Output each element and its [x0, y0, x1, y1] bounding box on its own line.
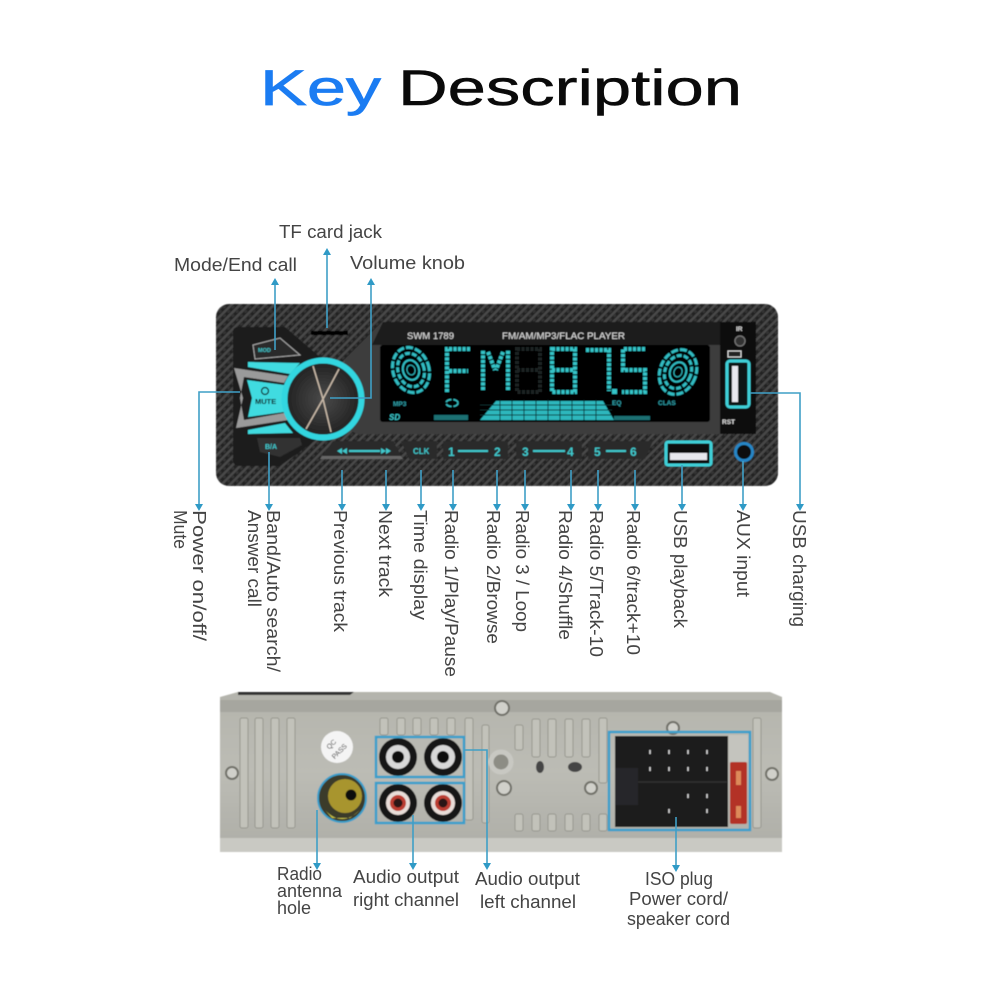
preset button 1-2: 1: [448, 445, 455, 459]
clock button: [401, 441, 437, 459]
right speaker rings: [653, 344, 703, 400]
player label: FM/AM/MP3/FLAC PLAYER: [502, 331, 625, 342]
leader lines and arrows: front: [195, 248, 804, 511]
label: Power on/off/ Mute: Power on/off/: [189, 510, 209, 641]
label: Audio output right channel: Audio output: [353, 867, 459, 887]
label: Radio 1/Play/Pause: Radio 1/Play/Pause: [441, 510, 461, 677]
spectrum grid: [480, 400, 612, 420]
label: Band/Auto search/ Answer call: [244, 510, 283, 672]
label: Radio 5/Track-10: Radio 5/Track-10: [586, 510, 606, 657]
indicator labels: EQ: [612, 400, 621, 407]
label: USB playback: USB playback: [670, 510, 690, 629]
faceplate body: [216, 304, 778, 486]
label: ISO plug Power cord speaker cord: ISO plug: [645, 869, 713, 889]
radio antenna socket: [318, 774, 366, 822]
QC PASS sticker: PASS: [331, 743, 349, 761]
ghost digits: [517, 349, 540, 392]
label: Band/Auto search/ Answer call: Answer call: [244, 510, 264, 607]
panel: left button cluster: [233, 327, 340, 466]
screws: [226, 701, 778, 795]
digit 7: [586, 350, 609, 391]
label: Radio antenna hole: hole: [277, 898, 311, 918]
label: USB charging: USB charging: [789, 510, 809, 627]
label: Next track: Next track: [375, 510, 395, 598]
lower cyan wedge: [248, 423, 293, 434]
battery icon: [728, 351, 741, 357]
digit 8: [552, 349, 575, 392]
label: Radio 2/Browse: Radio 2/Browse: [483, 510, 503, 644]
spectrum bars: [434, 401, 650, 420]
label: Radio 3 / Loop: Radio 3 / Loop: [512, 510, 532, 632]
label: Audio output left channel: left channel: [480, 892, 576, 912]
preset button 3-4: 3: [522, 445, 529, 459]
model label: SWM 1789: [407, 331, 454, 342]
fuse: [729, 735, 748, 824]
oval holes: [536, 761, 582, 773]
top strip of display housing: [372, 322, 723, 345]
vents: [240, 718, 761, 831]
label: Audio output left channel: [475, 869, 580, 912]
panel: rear of car radio: [220, 692, 782, 852]
label: Radio antenna hole: antenna: [277, 881, 343, 901]
mute button: MUTE: [255, 397, 276, 406]
label: AUX input: AUX input: [733, 510, 753, 597]
label: Audio output right channel: right channel: [353, 890, 459, 910]
leader lines and arrows: rear: [313, 750, 680, 872]
label: Band/Auto search/ Answer call: Band/Auto search/: [263, 510, 283, 672]
bottom rail: [220, 838, 782, 852]
upper cyan wedge: [248, 362, 300, 374]
label: TF card jack: TF card jack: [279, 222, 383, 242]
RST label: RST: [722, 419, 735, 426]
digit M: [483, 350, 508, 390]
label: Volume knob: Volume knob: [350, 253, 465, 273]
indicator labels: SD: [389, 413, 400, 422]
panel: front of car radio: [216, 304, 778, 486]
digit 5: [622, 349, 645, 392]
title: [260, 60, 742, 116]
label: ISO plug Power cord speaker cord: Power cord/: [629, 889, 728, 909]
right side panel: [720, 322, 756, 434]
volume knob: [284, 360, 362, 438]
IR sensor: [735, 326, 745, 346]
label: Mode/End call: Mode/End call: [174, 255, 297, 275]
decimal point: [612, 389, 617, 394]
label: Radio 4/Shuffle: Radio 4/Shuffle: [555, 510, 575, 640]
top edge highlight: [238, 692, 354, 695]
USB playback port: [666, 442, 711, 465]
title: Key: [260, 60, 381, 116]
ISO highlight frame: [609, 732, 750, 830]
clock button: CLK: [413, 447, 430, 456]
preset button 3-4: 4: [567, 445, 574, 459]
AUX jack: [736, 444, 752, 460]
band auto button: B/A: [265, 444, 277, 451]
preset button 1-2: 2: [494, 445, 501, 459]
preset button 5-6: 6: [630, 445, 637, 459]
USB charging port: [727, 361, 749, 407]
label: Radio 6/track+10: Radio 6/track+10: [623, 510, 643, 655]
ISO connector: [615, 736, 728, 827]
mode button: MOD: [258, 348, 271, 354]
mute frame: [234, 368, 288, 428]
label: ISO plug Power cord speaker cord: [627, 869, 730, 929]
preset button 5-6: [588, 441, 653, 459]
preset button 1-2: [443, 441, 508, 459]
QC PASS sticker: [321, 731, 353, 763]
display housing: [340, 322, 756, 434]
label: Time display: Time display: [410, 510, 430, 620]
TF card slot: [311, 331, 348, 335]
LCD screen: [380, 345, 710, 422]
IR sensor: IR: [736, 326, 743, 333]
preset button 5-6: 5: [594, 445, 601, 459]
indicator labels: [389, 400, 676, 422]
label: Power on/off/ Mute: [170, 510, 209, 641]
previous next button: [320, 441, 403, 459]
QC PASS sticker: QC: [326, 739, 338, 751]
label: Audio output left channel: Audio output: [475, 869, 580, 889]
top rail: [220, 700, 782, 712]
indicator labels: MP3: [393, 401, 407, 408]
label: Radio antenna hole: [277, 864, 343, 918]
title: Description: [398, 60, 742, 116]
label: Audio output right channel: [353, 867, 459, 910]
preset button 3-4: [516, 441, 582, 459]
label: Radio antenna hole: Radio: [277, 864, 322, 884]
rear metal chassis: [220, 692, 782, 850]
label: ISO plug Power cord speaker cord: speaker cord: [627, 909, 730, 929]
left speaker rings: [387, 343, 435, 397]
socket highlight boxes: [376, 737, 464, 823]
loop icon: [446, 400, 458, 406]
red RCA sockets: [379, 784, 462, 822]
label: Previous track: Previous track: [330, 510, 350, 633]
white RCA sockets: [379, 738, 462, 776]
indicator labels: CLAS: [658, 400, 676, 407]
label: Power on/off/ Mute: Mute: [170, 510, 190, 549]
digit F: [447, 349, 470, 392]
mounting boss: [491, 752, 511, 772]
